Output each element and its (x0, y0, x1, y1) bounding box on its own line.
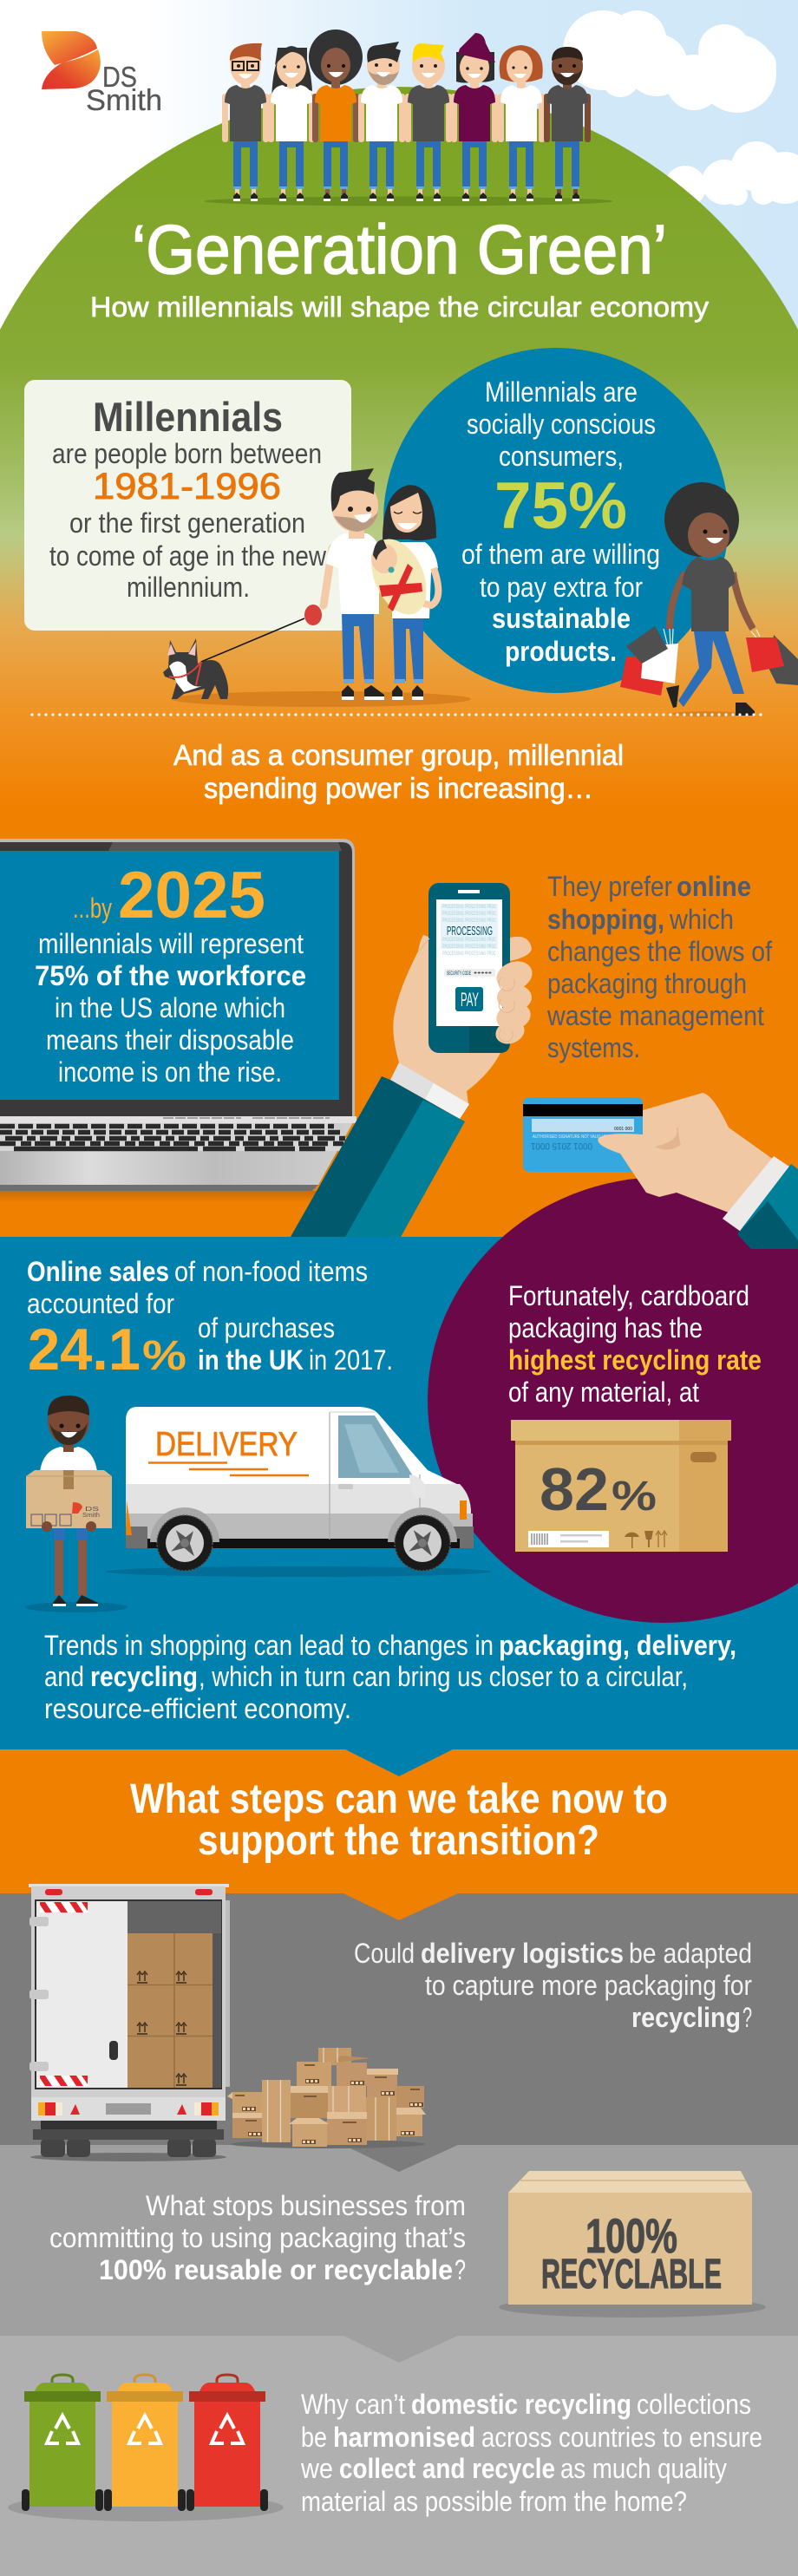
arrow: dark grey pointer (343, 2145, 458, 2172)
circle text: to pay extra for (480, 572, 643, 603)
box label: 100% (585, 2208, 677, 2263)
text: spending power intro (173, 739, 624, 804)
van window (338, 1415, 412, 1478)
text: online shopping: packaging through (547, 968, 747, 999)
arrow: mid grey pointer (343, 2336, 458, 2363)
smartphone: PROCESSING PROCESSING PROC (442, 945, 496, 950)
pile of cardboard boxes (227, 2048, 426, 2148)
text: delivery logistics question: ? (742, 2002, 752, 2033)
definition text: or the first generation (69, 507, 305, 539)
credit card held by hand (523, 1093, 798, 1249)
van body (126, 1407, 474, 1546)
text: domestic recycling question: collections (637, 2389, 751, 2420)
dotted divider (32, 713, 763, 716)
smartphone (428, 883, 510, 1053)
illustration: woman shopper with bags (620, 482, 798, 716)
text: cardboard recycling rate: Fortunately, cardboard (508, 1280, 749, 1311)
delivery truck rear view (29, 1884, 230, 2161)
text: businesses question: 100% reusable or recyclable (99, 2254, 453, 2285)
text: businesses question: What stops businesses from (146, 2190, 466, 2221)
circle text: sustainable (492, 603, 631, 634)
text: domestic recycling question: across countries to ensure (481, 2422, 762, 2453)
laptop base and keyboard (0, 1116, 356, 1191)
text: delivery logistics question: Could (354, 1938, 415, 1969)
panel: grey section businesses (0, 2145, 798, 2336)
credit card held by hand: AUTHORISED SIGNATURE NOT VALID UNLESS SIGNED (533, 1134, 632, 1140)
green hill fading to orange background (0, 87, 798, 1237)
logo: DS Smith (42, 31, 162, 117)
years 1981-1996: 1981-1996 (93, 466, 281, 507)
person 2: long black hair (268, 46, 315, 201)
credit card held by hand: 0001 000 (614, 1127, 632, 1132)
text: online sales: in 2017. (309, 1344, 393, 1376)
text: online sales (27, 1256, 393, 1376)
panel: purple circle (428, 1177, 798, 1623)
screen text: income is on the rise. (58, 1056, 282, 1088)
sky background (0, 0, 798, 364)
text: trends in shopping: packaging, delivery, (499, 1630, 736, 1661)
cardboard box 82% (511, 1420, 731, 1552)
person 8: dark skin, beard (544, 47, 591, 201)
person 7: auburn bob (498, 45, 545, 201)
logo: DS Smith: DS (102, 61, 137, 93)
arrow: orange pointer (343, 1893, 458, 1920)
van wheels (157, 1515, 450, 1571)
text: domestic recycling question: domestic recycling (411, 2389, 631, 2420)
circle text: of them are willing (461, 539, 660, 570)
text: online shopping: online (677, 871, 751, 902)
truck bumper and lights (31, 2097, 226, 2121)
panel: orange transition heading band (0, 1749, 798, 1893)
circle text: Millennials are (485, 376, 638, 408)
shopping bags (620, 626, 798, 696)
recycling bins (8, 2375, 284, 2521)
smartphone: PROCESSING PROCESSING PROC (442, 912, 496, 917)
smartphone: SECURITY CODE (447, 971, 471, 977)
text: spending power intro: spending power is increasing… (204, 772, 593, 804)
circle text: products. (505, 636, 617, 667)
text: online shopping: They prefer (547, 871, 672, 902)
text: domestic recycling question: Why can’t (301, 2389, 405, 2420)
stat 82% (540, 1455, 657, 1523)
stat 82%: % (612, 1474, 657, 1520)
fingers (493, 957, 536, 1048)
text: online sales: accounted for (27, 1288, 174, 1319)
text: businesses question: ? (455, 2254, 466, 2285)
smartphone: PROCESSING PROCESSING PROC (442, 919, 496, 924)
panel: blue section background (0, 1237, 798, 1749)
by 2025: ...by (73, 892, 112, 924)
stat 82%: 82 (540, 1455, 609, 1523)
text: domestic recycling question: as much quality (560, 2453, 727, 2484)
text: domestic recycling question (300, 2389, 762, 2517)
hazard stripes (40, 1902, 88, 2086)
person 5: blond hair (405, 43, 452, 201)
smartphone: ••••• (474, 971, 493, 977)
shipping label (528, 1531, 609, 1547)
laptop screen (0, 851, 339, 1100)
panel: millennials definition (24, 380, 351, 631)
text: online sales: of purchases (198, 1312, 335, 1344)
text: delivery logistics question: to capture more packaging for (425, 1970, 752, 2001)
delivery man with parcel (25, 1396, 128, 1612)
smartphone: PROCESSING PROCESSING PROC (442, 905, 496, 910)
dog on leash (163, 605, 322, 699)
smartphone: PAY (461, 989, 479, 1010)
panel: grey section delivery logistics (0, 1893, 798, 2145)
person 3: afro, orange shirt (309, 29, 363, 201)
panel: blue circle 75% (383, 348, 729, 693)
definition text: millennium. (127, 572, 250, 603)
text: cardboard recycling rate (508, 1280, 762, 1408)
baby in swaddle (361, 531, 437, 623)
text: cardboard recycling rate: of any material, at (508, 1376, 699, 1408)
person 1: glasses (222, 43, 269, 201)
clouds (563, 10, 798, 207)
screen text: 75% of the workforce (35, 960, 306, 991)
text: domestic recycling question: we (300, 2453, 333, 2484)
text: online shopping: changes the flows of (547, 936, 772, 967)
smartphone: PROCESSING PROCESSING PROC (442, 951, 496, 957)
text: trends in shopping (44, 1630, 736, 1724)
heading: what steps: support the transition? (198, 1818, 599, 1864)
credit card held by hand: 0001 2015 0001 (531, 1141, 592, 1151)
delivery man with parcel: Smith (82, 1513, 100, 1519)
definition text: to come of age in the new (49, 540, 327, 572)
stat 75%: 75% (494, 469, 627, 543)
subtitle: How millennials will shape the circular economy (90, 291, 709, 323)
text: cardboard recycling rate: packaging has the (508, 1312, 703, 1344)
text: domestic recycling question: material as possible from the home? (301, 2486, 687, 2517)
text: trends in shopping: recycling (90, 1661, 198, 1692)
circle text: consumers, (499, 441, 624, 472)
text: delivery logistics question (354, 1938, 752, 2033)
box: 100% recyclable (499, 2171, 766, 2318)
text: trends in shopping: Trends in shopping can lead to changes in (44, 1630, 494, 1661)
green bin (22, 2375, 103, 2511)
text: delivery logistics question: delivery logistics (421, 1938, 624, 1969)
text: domestic recycling question: collect and recycle (339, 2453, 555, 2484)
text: delivery logistics question: be adapted (629, 1938, 752, 1969)
text: online shopping: shopping, (547, 904, 664, 935)
person 4: spiky hair, beard (358, 42, 405, 201)
box label (541, 2208, 722, 2298)
text: businesses question (49, 2190, 466, 2285)
text: online shopping: systems. (547, 1032, 640, 1063)
heading: what steps (130, 1776, 668, 1864)
screen text: millennials will represent (38, 928, 304, 959)
text: cardboard recycling rate: highest recycling rate (508, 1344, 762, 1376)
logo: DS Smith: Smith (86, 84, 162, 117)
van wheel arches (150, 1507, 457, 1542)
text: trends in shopping: , which in turn can bring us closer to a circular, (199, 1661, 688, 1692)
circle text: socially conscious (467, 409, 656, 440)
delivery man with parcel: DS (85, 1507, 100, 1513)
screen text (35, 928, 306, 1088)
yellow bin (104, 2375, 186, 2511)
illustration: family with dog (163, 468, 471, 707)
text: delivery logistics question: recycling (631, 2002, 741, 2033)
laptop lid (0, 839, 355, 1119)
man (324, 468, 384, 700)
smartphone: PROCESSING (447, 924, 493, 938)
laptop (0, 839, 356, 1203)
arrow: blue pointer (345, 1749, 453, 1776)
smartphone: PROCESSING PROCESSING PROC (442, 938, 496, 943)
stat 24.1%: % (142, 1333, 186, 1379)
by 2025: 2025 (118, 859, 265, 932)
heading: what steps: What steps can we take now to (130, 1776, 668, 1822)
text: spending power intro: And as a consumer group, millennial (173, 739, 624, 771)
stat 24.1%: 24.1 (28, 1317, 141, 1383)
title: ‘Generation Green’ (132, 211, 667, 288)
heading: Millennials: Millennials (93, 394, 283, 440)
text: online sales: of non-food items (174, 1256, 368, 1287)
text: domestic recycling question: be (301, 2422, 327, 2453)
text: businesses question: committing to using packaging that’s (49, 2222, 466, 2253)
text: trends in shopping: resource-efficient economy. (44, 1693, 351, 1724)
screen text: in the US alone which (55, 992, 285, 1023)
text: online sales: in the UK (198, 1344, 304, 1376)
red bin (186, 2375, 268, 2511)
text: online sales: Online sales (27, 1256, 169, 1287)
text: domestic recycling question: harmonised (333, 2422, 475, 2453)
delivery lettering: DELIVERY (155, 1426, 298, 1463)
text: online shopping: waste management (546, 1000, 764, 1031)
definition text: are people born between (52, 438, 322, 469)
definition text (49, 438, 327, 603)
text: trends in shopping: and (44, 1661, 84, 1692)
screen text: means their disposable (46, 1024, 294, 1056)
text: online shopping: which (669, 904, 734, 935)
woman holding baby (361, 485, 438, 700)
person 6: beanie, purple shirt (451, 33, 498, 201)
handling icons (625, 1531, 667, 1548)
panel: light grey section recycling (0, 2336, 798, 2576)
sleeve and hand holding phone (291, 883, 536, 1237)
delivery van (106, 1407, 491, 1577)
text: online shopping (546, 871, 772, 1063)
circle text (461, 376, 660, 667)
group of eight millennials (204, 29, 613, 206)
